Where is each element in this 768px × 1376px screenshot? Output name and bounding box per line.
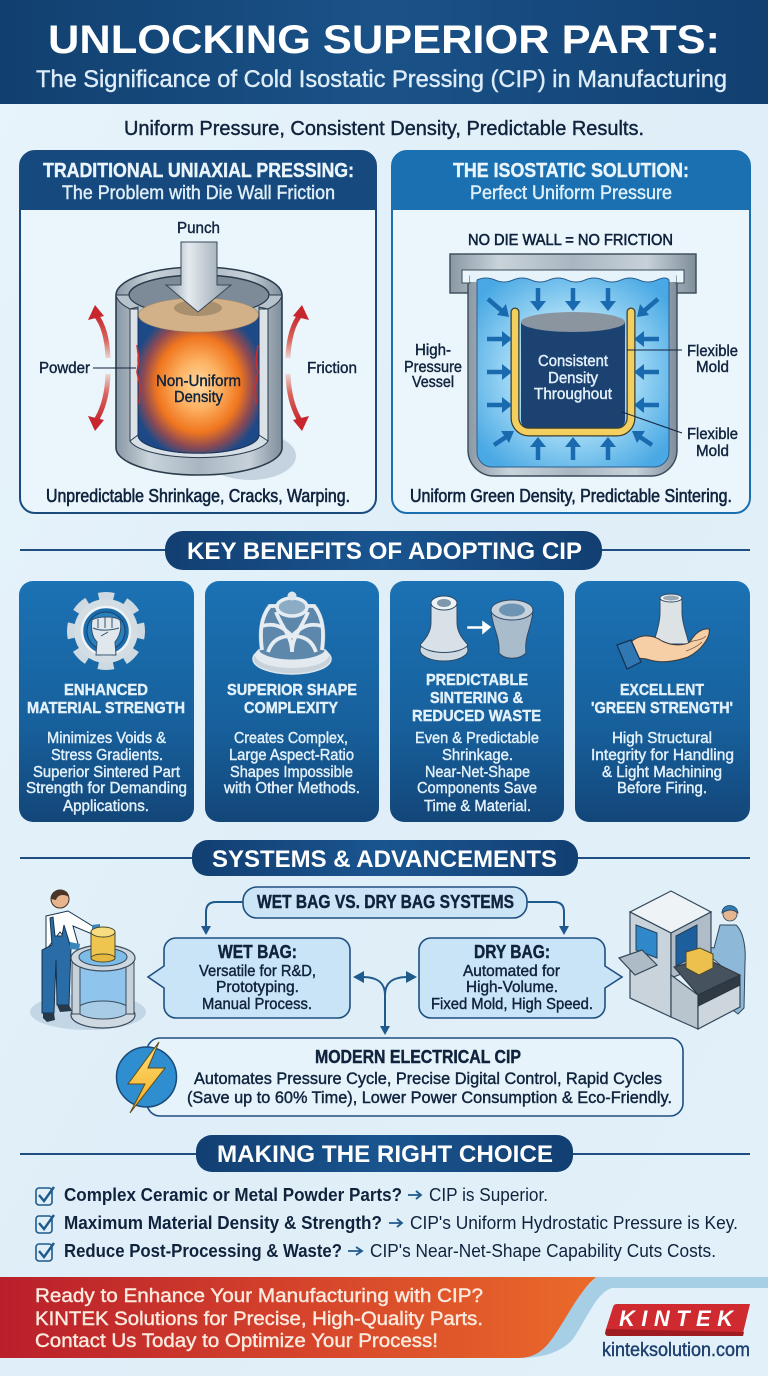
panel text: (Save up to 60% Time), Lower Power Consumption & Eco-Friendly. <box>187 1089 672 1107</box>
cracks <box>137 345 258 404</box>
icon: part shrinkage <box>420 596 533 661</box>
section heading: key benefits: KEY BENEFITS OF ADOPTING CIP <box>187 538 582 565</box>
card text <box>415 730 539 815</box>
card text: Shrinkage. <box>442 747 513 764</box>
card heading <box>591 682 733 717</box>
arrows: friction <box>88 305 309 431</box>
card text: Components Save <box>417 780 537 797</box>
card: predictable sintering <box>390 581 564 822</box>
card text <box>223 730 360 797</box>
label: high-pressure vessel: Vessel <box>412 374 454 391</box>
item: post-processing: CIP's Near-Net-Shape Capability Cuts Costs. <box>370 1241 716 1261</box>
item: density and strength: CIP's Uniform Hydrostatic Pressure is Key. <box>410 1213 738 1233</box>
card text: Integrity for Handling <box>591 747 734 764</box>
card: excellent green strength <box>575 581 750 822</box>
card text: Near-Net-Shape <box>425 764 530 781</box>
label: non-uniform density: Density <box>174 389 223 406</box>
card text: Applications. <box>63 798 149 815</box>
card text: Creates Complex, <box>234 730 348 747</box>
label: powder: Powder <box>39 360 91 377</box>
icon: punch arrow <box>166 242 231 312</box>
label: consistent density: Consistent <box>538 353 609 370</box>
heading box: wet vs dry bag: WET BAG VS. DRY BAG SYSTEMS <box>257 892 514 912</box>
card heading: PREDICTABLE <box>426 672 528 689</box>
illustration: dry bag machine and operator <box>619 891 745 1029</box>
pressure arrows <box>487 288 659 460</box>
icon: hand holding part <box>617 594 709 669</box>
operator <box>698 925 745 1014</box>
card text: Before Firing. <box>617 780 707 797</box>
label: consistent density <box>534 353 613 403</box>
panel heading: MODERN ELECTRICAL CIP <box>315 1047 521 1067</box>
panel: traditional uniaxial pressing <box>20 151 376 513</box>
card text: Time & Material. <box>424 798 531 815</box>
card heading <box>27 682 185 717</box>
callout: wet bag: WET BAG: <box>218 942 297 962</box>
label: flexible mold upper: Mold <box>696 359 729 376</box>
label: consistent density: Throughout <box>534 386 613 403</box>
operator <box>46 911 94 950</box>
card text: Large Aspect-Ratio <box>229 747 354 764</box>
vessel diagram <box>450 254 696 476</box>
title: UNLOCKING SUPERIOR PARTS: <box>48 18 720 62</box>
item: post-processing <box>36 1241 716 1261</box>
subtitle: The Significance of Cold Isostatic Pressing (CIP) in Manufacturing <box>36 66 727 93</box>
callout: wet bag: Manual Process. <box>202 996 312 1013</box>
die diagram <box>116 242 296 480</box>
label: non-uniform density <box>156 373 241 406</box>
title banner <box>0 0 768 104</box>
item: post-processing: Reduce Post-Processing & Waste? <box>64 1241 342 1261</box>
callout: wet bag: Prototyping. <box>216 979 299 996</box>
powder compact <box>521 322 625 429</box>
arrows: to wet and dry bag <box>201 902 569 935</box>
checklist <box>36 1185 738 1261</box>
card heading: REDUCED WASTE <box>412 708 541 725</box>
card heading: EXCELLENT <box>620 682 704 699</box>
panel header: Perfect Uniform Pressure <box>470 183 672 204</box>
card heading: ENHANCED <box>64 682 148 699</box>
card text: High Structural <box>612 730 712 747</box>
label: no die wall: NO DIE WALL = NO FRICTION <box>468 232 673 249</box>
panel header <box>20 151 376 210</box>
item: complex parts: CIP is Superior. <box>429 1185 548 1205</box>
card text: Shapes Impossible <box>230 764 353 781</box>
call to action text: Contact Us Today to Optimize Your Process! <box>35 1330 438 1352</box>
card text: Minimizes Voids & <box>47 730 167 747</box>
callout: dry bag: DRY BAG: <box>474 942 550 962</box>
label: flexible mold lower: Mold <box>696 443 729 460</box>
section heading: making the right choice: MAKING THE RIGHT CHOICE <box>217 1141 553 1168</box>
callout: dry bag: Fixed Mold, High Speed. <box>431 996 593 1013</box>
heading box: wet vs dry bag <box>243 887 527 918</box>
label: consistent density: Density <box>548 370 598 387</box>
label: high-pressure vessel <box>404 342 462 391</box>
label: flexible mold upper <box>627 343 738 376</box>
card heading <box>227 682 357 717</box>
item: complex parts <box>36 1185 548 1205</box>
panel text: Automates Pressure Cycle, Precise Digital Control, Rapid Cycles <box>194 1070 662 1088</box>
label: punch: Punch <box>177 220 220 237</box>
panel text <box>187 1070 672 1107</box>
card text: & Light Machining <box>602 764 722 781</box>
flexible mold <box>515 312 631 432</box>
label: flexible mold upper: Flexible <box>687 343 738 360</box>
card heading: SUPERIOR SHAPE <box>227 682 357 699</box>
card text: Even & Predictable <box>415 730 539 747</box>
section heading: systems and advancements: SYSTEMS & ADVANCEMENTS <box>212 846 557 873</box>
call to action text: KINTEK Solutions for Precise, High-Quality Parts. <box>35 1308 483 1330</box>
logo: kintek: KINTEK <box>619 1306 735 1331</box>
card text <box>26 730 187 815</box>
logo: kintek <box>605 1304 750 1336</box>
card text: Stress Gradients. <box>51 747 163 764</box>
icon: gear with fist <box>68 593 144 669</box>
tagline: Uniform Pressure, Consistent Density, Predictable Results. <box>124 118 644 140</box>
machine body <box>630 891 711 933</box>
panel header: THE ISOSTATIC SOLUTION: <box>453 160 689 182</box>
panel: modern electrical cip <box>116 1038 683 1116</box>
card text: with Other Methods. <box>223 780 360 797</box>
panel caption: Uniform Green Density, Predictable Sintering. <box>410 486 732 506</box>
icon: lightning bolt <box>116 1042 176 1113</box>
card heading <box>412 672 541 725</box>
callout: dry bag: Automated for <box>463 963 561 980</box>
item: density and strength <box>36 1213 738 1233</box>
press <box>76 960 130 1008</box>
callout: wet bag <box>148 938 350 1018</box>
callout: wet bag: Versatile for R&D, <box>199 963 316 980</box>
call to action text <box>35 1285 483 1352</box>
label: flexible mold lower: Flexible <box>687 426 738 443</box>
footer band <box>0 1277 768 1361</box>
card heading: MATERIAL STRENGTH <box>27 700 185 717</box>
section heading: making the right choice <box>20 1135 750 1172</box>
label: powder <box>39 360 136 377</box>
card text: Superior Sintered Part <box>33 764 181 781</box>
card heading: COMPLEXITY <box>244 700 338 717</box>
card heading: 'GREEN STRENGTH' <box>591 700 733 717</box>
card heading: SINTERING & <box>430 690 523 707</box>
panel header: TRADITIONAL UNIAXIAL PRESSING: <box>43 160 354 182</box>
item: complex parts: Complex Ceramic or Metal Powder Parts? <box>64 1185 402 1205</box>
label: flexible mold lower <box>622 412 738 460</box>
section heading: key benefits <box>20 531 750 570</box>
card text <box>591 730 734 797</box>
label: high-pressure vessel: Pressure <box>404 359 462 376</box>
arrows: center branch <box>353 971 417 1035</box>
card: enhanced material strength <box>19 581 194 822</box>
item: density and strength: Maximum Material Density & Strength? <box>64 1213 382 1233</box>
label: non-uniform density: Non-Uniform <box>156 373 241 390</box>
panel header <box>392 151 750 210</box>
callout: dry bag: High-Volume. <box>466 979 558 996</box>
panel: isostatic solution <box>392 151 750 513</box>
icon: lattice part <box>253 592 331 674</box>
callout: dry bag <box>419 938 622 1018</box>
call to action text: Ready to Enhance Your Manufacturing with CIP? <box>35 1285 483 1307</box>
label: high-pressure vessel: High- <box>415 342 451 359</box>
panel caption: Unpredictable Shrinkage, Cracks, Warping. <box>46 486 350 506</box>
section heading: systems and advancements <box>20 840 750 876</box>
call to action banner <box>0 1277 596 1358</box>
label: friction: Friction <box>307 360 357 377</box>
illustration: wet bag operator and press <box>30 890 146 1030</box>
card: superior shape complexity <box>205 581 379 822</box>
website: kinteksolution.com <box>602 1339 750 1361</box>
panel header: The Problem with Die Wall Friction <box>62 183 335 204</box>
card text: Strength for Demanding <box>26 780 187 797</box>
